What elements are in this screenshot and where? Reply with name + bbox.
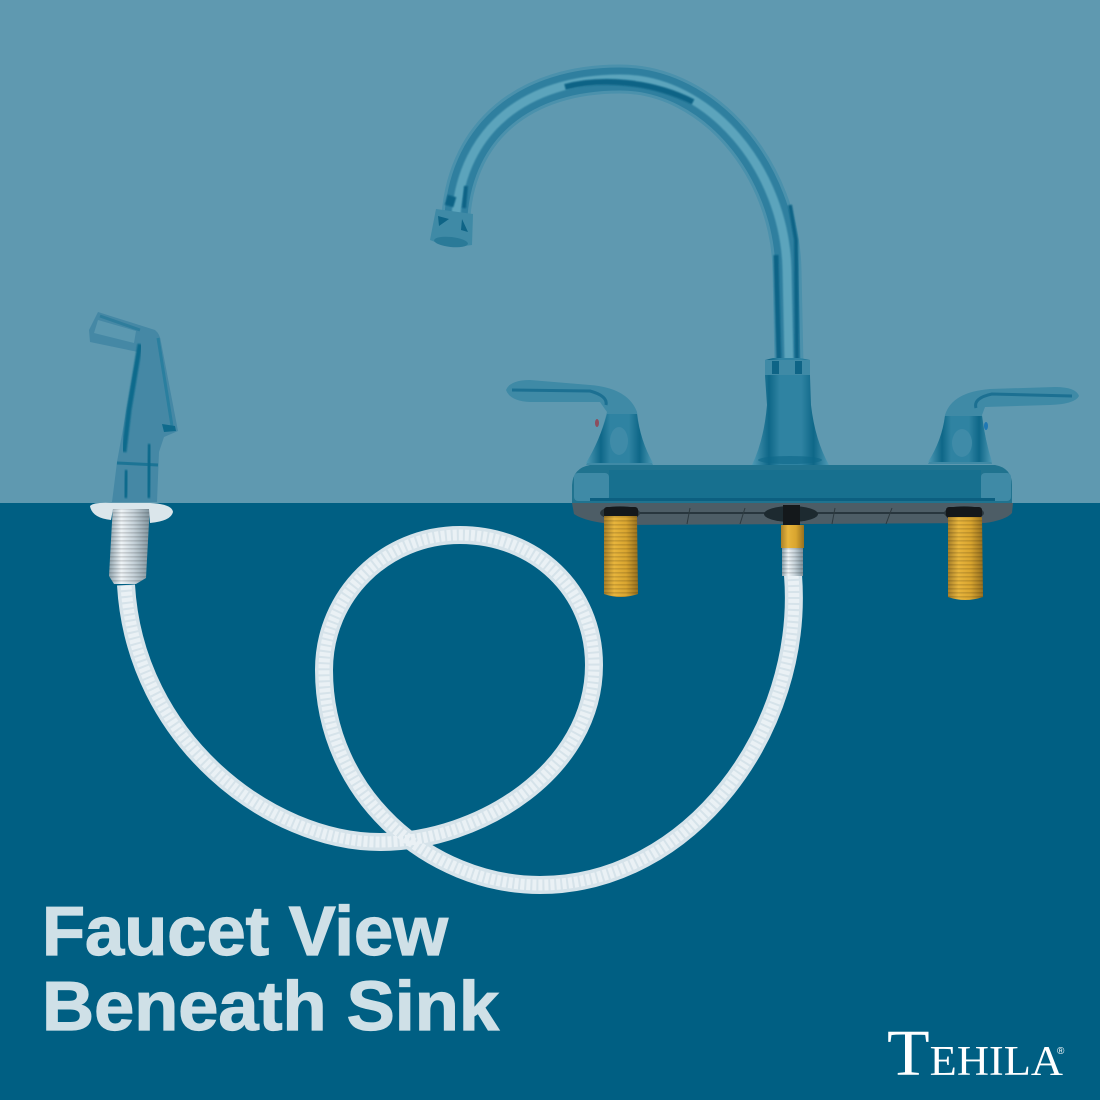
subtitle: Beneath Sink bbox=[42, 967, 499, 1045]
hot indicator bbox=[595, 419, 599, 427]
icon: deck underside bbox=[572, 503, 1013, 525]
logo: Tehila: TEHILA bbox=[887, 1017, 1064, 1090]
icon: right lever handle bbox=[928, 387, 1079, 464]
icon: spout base bbox=[752, 358, 829, 465]
icon: side sprayer bbox=[89, 312, 178, 584]
icon: deck plate bbox=[572, 465, 1012, 503]
icon: gooseneck spout bbox=[449, 79, 797, 365]
icon: braided hose bbox=[126, 535, 794, 885]
icon: aerator nozzle bbox=[430, 209, 473, 249]
background: lower under-sink panel bbox=[0, 503, 1100, 1100]
sprayer threaded stem bbox=[109, 504, 150, 584]
logo: registered mark: ® bbox=[1057, 1046, 1065, 1057]
icon: center hose connector bbox=[781, 505, 804, 576]
sprayer flange bbox=[90, 503, 173, 523]
background: upper wall panel bbox=[0, 0, 1100, 503]
sprayer body bbox=[89, 312, 178, 502]
icon: right brass shank bbox=[946, 507, 983, 600]
title: Faucet View bbox=[42, 892, 449, 970]
icon: left lever handle bbox=[506, 380, 653, 465]
icon: left brass shank bbox=[604, 507, 638, 597]
cold indicator bbox=[984, 422, 988, 430]
